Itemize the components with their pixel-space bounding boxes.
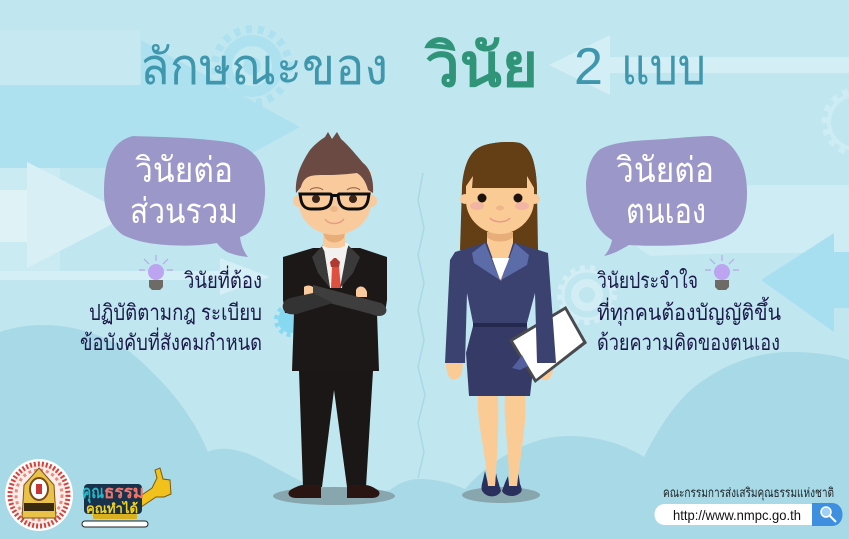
panel: personal discipline speech bubble: วินัยต่อ	[616, 151, 714, 190]
panel: personal discipline speech bubble: ตนเอง	[626, 192, 706, 231]
panel: collective discipline speech bubble	[104, 136, 265, 257]
logo: คุณธรรม คุณทำได้	[82, 468, 171, 527]
text block: collective discipline description: วินัยที่ต้อง	[183, 265, 262, 293]
text block: personal discipline description: ด้วยความคิดของตนเอง	[597, 330, 780, 355]
website search bar: http://www.nmpc.go.th	[673, 507, 801, 523]
text block: personal discipline description: วินัยประจำใจ	[596, 268, 698, 293]
icon: left light bulb	[139, 255, 173, 290]
text block: collective discipline description: ข้อบังคับที่สังคมกำหนด	[80, 327, 262, 355]
title: วินัย	[424, 32, 538, 99]
title: ลักษณะของ	[140, 39, 388, 95]
logo: คุณธรรม คุณทำได้: คุณ	[82, 482, 104, 504]
title	[140, 32, 706, 99]
text block: personal discipline description	[596, 268, 781, 355]
text block: collective discipline description: ปฏิบัติตามกฎ ระเบียบ	[89, 300, 262, 325]
man in black suit	[273, 132, 395, 505]
panel: collective discipline speech bubble: ส่วนรวม	[130, 192, 238, 231]
text block: collective discipline description	[80, 265, 262, 355]
icon: search magnifier	[812, 503, 842, 526]
logo: organisation seal	[5, 459, 73, 531]
website search bar	[654, 503, 842, 526]
panel: collective discipline speech bubble: วินัยต่อ	[135, 151, 233, 190]
icon: right light bulb	[705, 255, 739, 290]
text block: personal discipline description: ที่ทุกคนต้องบัญญัติขึ้น	[597, 297, 781, 326]
logo: คุณธรรม คุณทำได้: ธรรม	[104, 482, 144, 502]
logo: คุณธรรม คุณทำได้: คุณทำได้	[86, 500, 138, 517]
title: แบบ	[621, 39, 706, 95]
title: 2	[574, 38, 603, 96]
woman in navy suit	[445, 142, 587, 503]
panel: personal discipline speech bubble	[586, 136, 747, 256]
